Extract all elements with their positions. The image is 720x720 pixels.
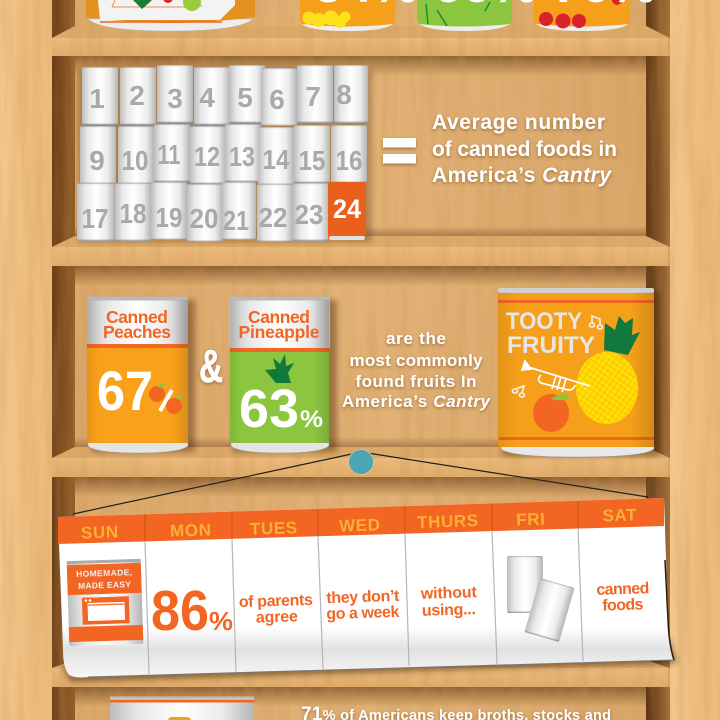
icon: pineapple bbox=[576, 316, 640, 424]
can 1: 1 bbox=[89, 83, 105, 114]
calendar bbox=[58, 498, 677, 682]
can: homemade made easy: MADE EASY bbox=[78, 579, 131, 591]
right inner walls bbox=[646, 0, 670, 720]
can: homemade made easy bbox=[67, 559, 143, 646]
can 19: 19 bbox=[156, 202, 182, 233]
text: average number of canned foods: America’s Cantry bbox=[432, 164, 612, 187]
weekday labels: FRI bbox=[516, 510, 546, 529]
shelf shadows on back panel bbox=[75, 56, 646, 707]
calendar hanger strings bbox=[73, 452, 648, 514]
shadow behind stack bbox=[78, 70, 372, 242]
can 16 bbox=[331, 125, 367, 183]
text: canned foods: foods bbox=[602, 596, 644, 615]
text: canned foods bbox=[596, 580, 650, 615]
left inner walls bbox=[52, 0, 75, 720]
text: most commonly found fruits: America’s Cantry bbox=[342, 392, 492, 411]
stat: 86%: % bbox=[209, 606, 233, 636]
can: tooty fruity: TOOTY bbox=[506, 308, 582, 335]
can 7: 7 bbox=[305, 81, 321, 112]
text: they don't go a week: go a week bbox=[326, 604, 400, 623]
can 8: 8 bbox=[336, 79, 352, 110]
can 19 bbox=[151, 182, 187, 240]
can 24 orange bbox=[328, 182, 366, 240]
equals sign bbox=[383, 138, 416, 164]
can 12 bbox=[190, 126, 226, 184]
weekday labels: WED bbox=[339, 515, 381, 536]
text: canned foods: canned bbox=[596, 580, 650, 599]
can: canned peaches 67%: Canned bbox=[106, 307, 168, 327]
text: most commonly found fruits: most commonly bbox=[350, 351, 483, 370]
shelf 1 bbox=[52, 26, 668, 56]
pineapple crown bbox=[265, 354, 294, 383]
can 21 bbox=[222, 182, 256, 240]
text: of parents agree: of parents bbox=[239, 592, 313, 611]
can 18: 18 bbox=[120, 198, 146, 229]
text: without using: without bbox=[420, 584, 478, 603]
can: canned pineapple 63%: % bbox=[300, 406, 323, 433]
text: average number of canned foods: Average number bbox=[432, 111, 605, 134]
column separators bbox=[145, 527, 583, 674]
weekday labels: SUN bbox=[81, 522, 119, 543]
hanger pin bbox=[348, 450, 374, 474]
can 13 bbox=[225, 124, 261, 182]
can: canned peaches 67% bbox=[87, 296, 195, 453]
can 7 bbox=[297, 65, 333, 123]
shelf 3 bbox=[52, 447, 668, 477]
weekday labels: SAT bbox=[602, 505, 637, 526]
text: they don't go a week: they don’t bbox=[326, 588, 400, 607]
shelf 2 bbox=[52, 236, 668, 266]
can: canned peaches 67%: Peaches bbox=[103, 322, 171, 342]
can 6 bbox=[261, 68, 297, 126]
can 10: 10 bbox=[122, 145, 148, 176]
text: most commonly found fruits: are the bbox=[386, 329, 446, 348]
can: tooty fruity bbox=[498, 288, 660, 457]
can 24 orange: 24 bbox=[333, 194, 361, 224]
bottom can bbox=[110, 696, 254, 720]
text: average number of canned foods bbox=[432, 111, 617, 187]
calendar shadow bbox=[62, 640, 677, 682]
can 1 bbox=[82, 67, 118, 125]
weekday labels: TUES bbox=[250, 518, 298, 539]
can 5: 5 bbox=[237, 82, 253, 113]
can 22 bbox=[257, 184, 293, 242]
text: of parents agree: agree bbox=[256, 608, 298, 627]
can 2 bbox=[120, 67, 156, 125]
weekday labels bbox=[81, 505, 637, 543]
can: canned peaches 67%: 67 bbox=[97, 359, 153, 422]
can: homemade made easy: HOMEMADE, bbox=[76, 567, 132, 579]
can 6: 6 bbox=[269, 84, 285, 115]
text: most commonly found fruits: found fruits In bbox=[356, 372, 476, 391]
left post bbox=[0, 0, 52, 720]
can: canned pineapple 63%: 63 bbox=[239, 379, 299, 439]
header band bbox=[58, 498, 664, 544]
can 20 bbox=[187, 184, 223, 242]
text: most commonly found fruits bbox=[342, 329, 492, 411]
can: canned pineapple 63% bbox=[229, 296, 337, 453]
weekday labels: THURS bbox=[417, 511, 479, 532]
stack of 24 numbered cans bbox=[77, 65, 372, 242]
icon: apple bbox=[533, 394, 571, 432]
can 16: 16 bbox=[336, 145, 362, 176]
can 9: 9 bbox=[89, 145, 105, 176]
can 11: 11 bbox=[158, 139, 180, 170]
can 15 bbox=[294, 125, 330, 183]
can: canned pineapple 63%: Canned bbox=[248, 307, 310, 327]
can 14 bbox=[258, 127, 294, 185]
can 11 bbox=[154, 124, 190, 182]
can 23 bbox=[293, 183, 329, 241]
can 23: 23 bbox=[294, 199, 324, 230]
icon: oven bbox=[82, 593, 130, 625]
can 4 bbox=[194, 67, 230, 125]
can 17 bbox=[77, 183, 115, 241]
can 13: 13 bbox=[229, 141, 255, 172]
can 21: 21 bbox=[223, 205, 249, 236]
can 17: 17 bbox=[82, 203, 108, 234]
stat: 86%: 86 bbox=[151, 579, 209, 643]
can 8 bbox=[334, 65, 368, 123]
can 4: 4 bbox=[199, 82, 215, 113]
can 2: 2 bbox=[129, 80, 145, 111]
can: tooty fruity: FRUITY bbox=[507, 332, 595, 359]
can 3 bbox=[157, 65, 193, 123]
can: green 66% bbox=[417, 0, 537, 31]
can 14: 14 bbox=[262, 144, 290, 175]
can: canned pineapple 63%: Pineapple bbox=[238, 322, 320, 342]
can 10 bbox=[118, 126, 154, 184]
text: they don't go a week bbox=[326, 588, 400, 623]
can: tomatoes 76% bbox=[534, 0, 656, 31]
icon: trumpet bbox=[522, 361, 590, 392]
can 20: 20 bbox=[190, 203, 218, 234]
paper bbox=[58, 498, 674, 677]
can 3: 3 bbox=[167, 83, 183, 114]
icon: music notes bbox=[512, 316, 602, 397]
blank cans bbox=[507, 556, 575, 642]
can 5 bbox=[229, 65, 265, 123]
can 15: 15 bbox=[298, 145, 326, 176]
ampersand: & bbox=[199, 340, 223, 392]
can 12: 12 bbox=[194, 141, 220, 172]
text: average number of canned foods: of canned foods in bbox=[432, 138, 617, 161]
weekday labels: MON bbox=[170, 520, 212, 541]
top row cans bbox=[86, 0, 656, 31]
can 9 bbox=[80, 126, 116, 184]
text: of parents agree bbox=[239, 592, 313, 627]
shelf 4 bbox=[52, 660, 668, 687]
text: without using bbox=[420, 584, 478, 620]
can: corn 54% bbox=[300, 0, 418, 31]
text: without using: using... bbox=[422, 601, 476, 620]
can 18 bbox=[115, 183, 151, 241]
can: vegetables label bbox=[86, 0, 255, 31]
can 22: 22 bbox=[258, 202, 288, 233]
percent with peaches bbox=[149, 384, 185, 414]
right post bbox=[670, 0, 720, 720]
